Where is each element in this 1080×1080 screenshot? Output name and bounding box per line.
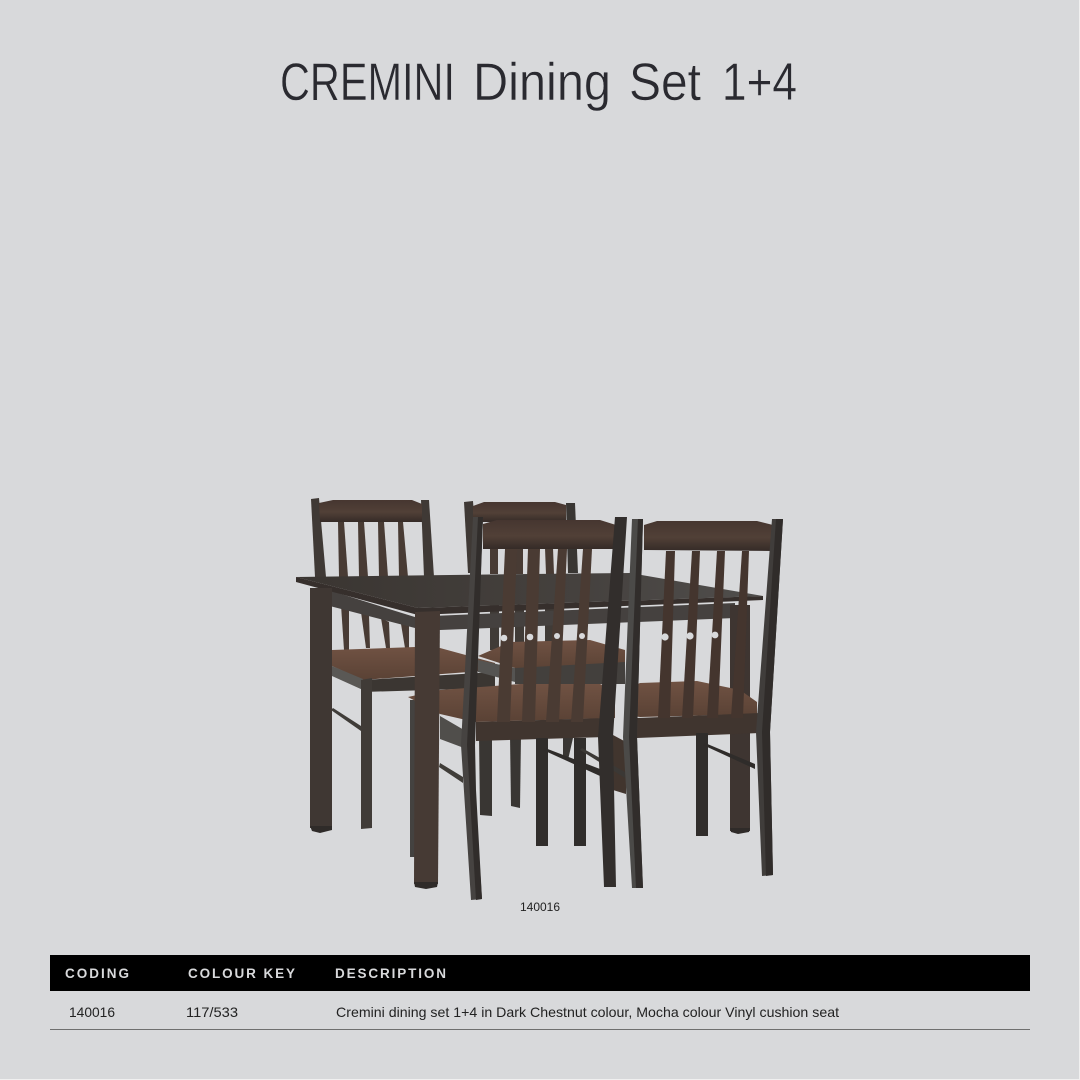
chair: back right bbox=[464, 501, 625, 816]
table row bbox=[50, 1004, 1030, 1030]
product image: dining set bbox=[296, 498, 783, 900]
title: CREMINI bbox=[280, 53, 455, 112]
chair: front left bbox=[439, 517, 627, 900]
title bbox=[280, 53, 797, 112]
table header: COLOUR KEY bbox=[188, 966, 295, 981]
table header: CODING bbox=[65, 966, 129, 981]
title: Dining bbox=[473, 53, 611, 112]
table: product specification bbox=[50, 955, 1030, 1030]
table front leg bbox=[414, 611, 440, 889]
product code caption: 140016 bbox=[520, 900, 560, 914]
chair: front right bbox=[623, 519, 783, 888]
table row: 117/533 bbox=[186, 1004, 238, 1020]
chair: back left bbox=[311, 498, 495, 857]
table bbox=[296, 573, 763, 834]
seat: front right chair bbox=[625, 681, 760, 738]
title: 1+4 bbox=[722, 53, 797, 112]
table header: DESCRIPTION bbox=[335, 966, 446, 981]
table row: Cremini dining set 1+4 in Dark Chestnut colour, Mocha colour Vinyl cushion seat bbox=[336, 1004, 839, 1020]
seat: front left chair bbox=[408, 684, 615, 748]
table row: 140016 bbox=[69, 1004, 115, 1020]
title: Set bbox=[629, 53, 701, 112]
table header bbox=[50, 955, 1030, 991]
